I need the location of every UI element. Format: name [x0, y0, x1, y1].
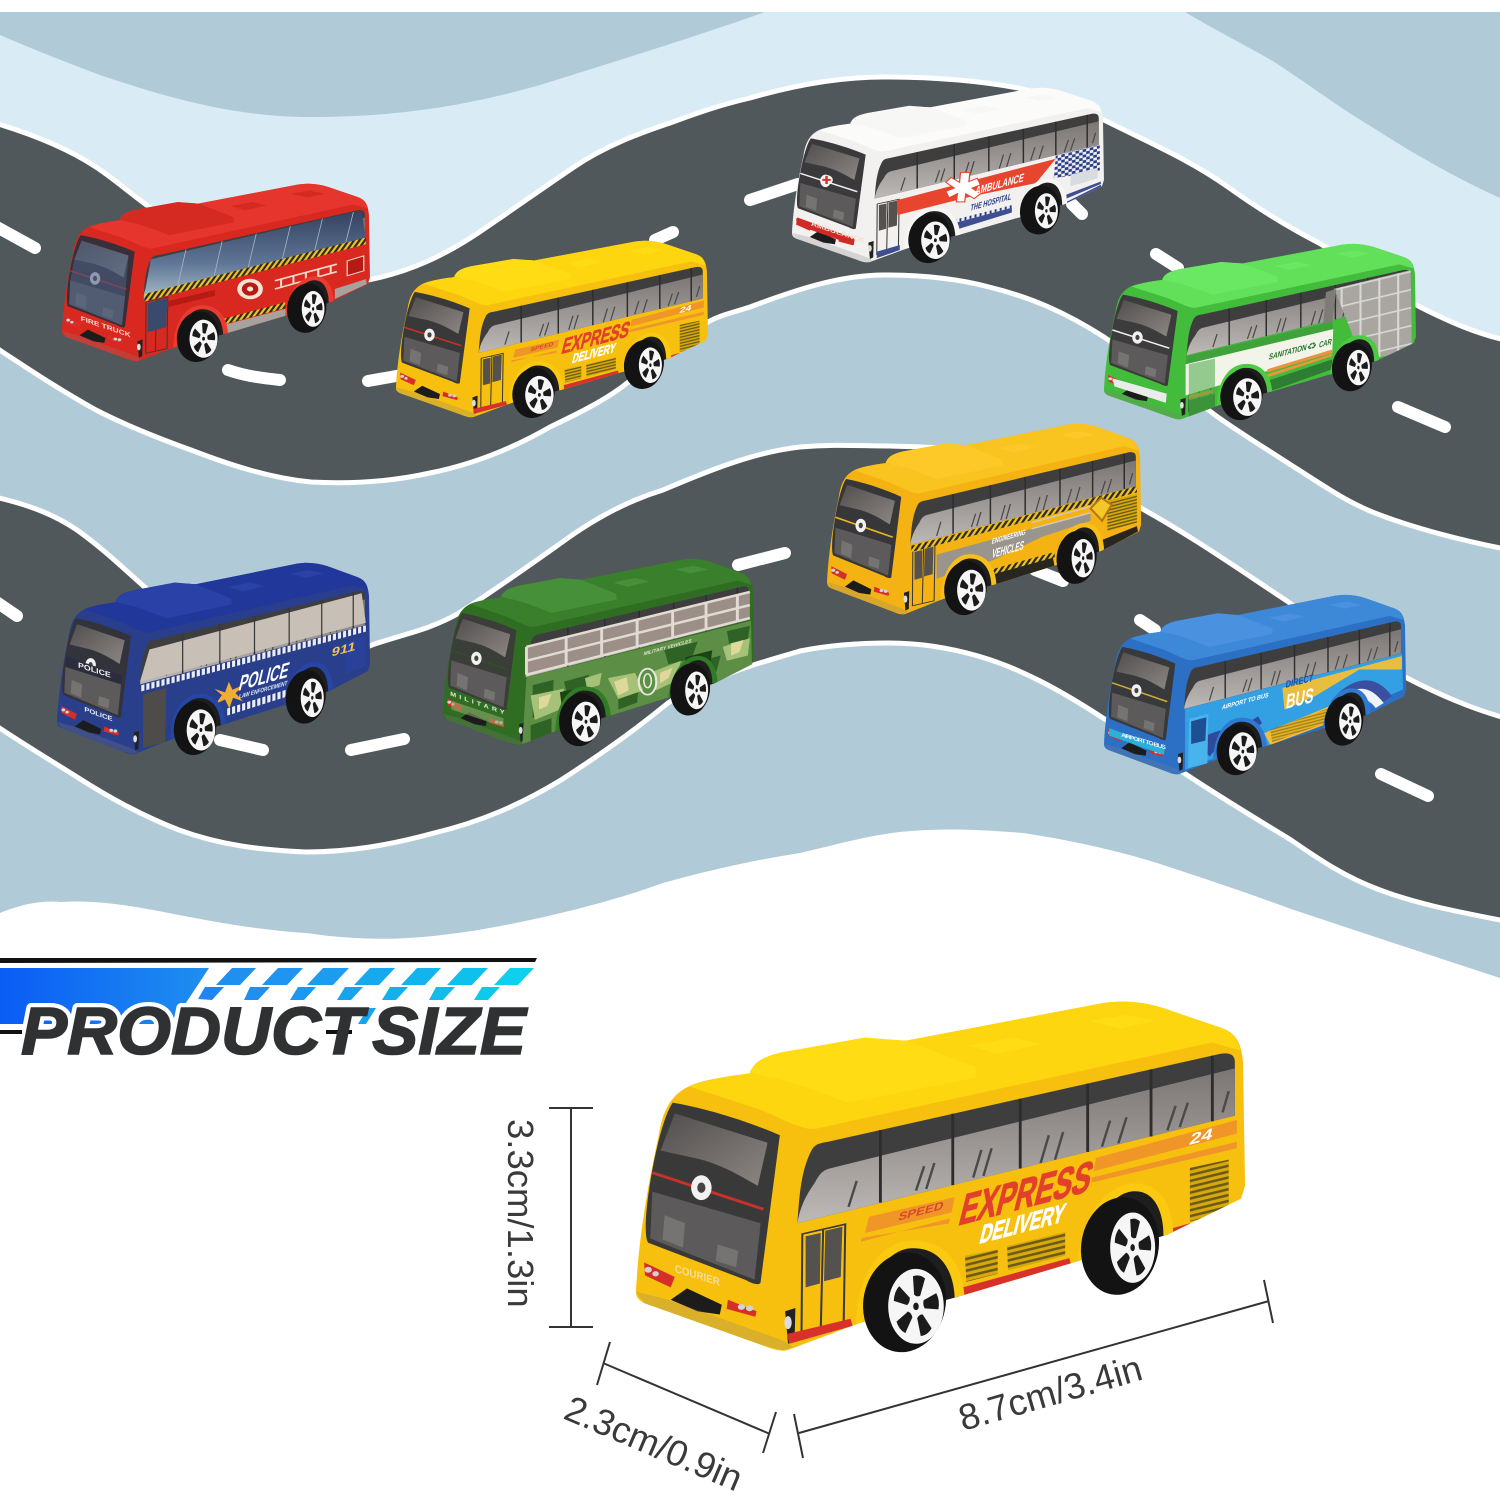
camouflage livery: MILITARY: [450, 691, 505, 717]
police livery: 911: [331, 638, 357, 659]
bus: green camouflage military: [443, 559, 754, 748]
express livery: 24: [678, 303, 693, 316]
express livery: [675, 1120, 1237, 1344]
bus: green sanitation: [1104, 244, 1416, 422]
sanitation livery: [1112, 270, 1412, 418]
sanitation text: SANITATION: [1268, 343, 1307, 362]
police livery: POLICE: [78, 660, 111, 680]
police star: [215, 682, 243, 708]
dimension: length: 8.7cm/3.4in: [954, 1347, 1147, 1439]
police text: POLICE: [236, 658, 292, 696]
sanitation livery: CAR: [1318, 337, 1333, 350]
road centre dashes: [0, 184, 1445, 796]
bus: white ambulance: [792, 88, 1104, 265]
military text: MILITARY VEHICLES: [643, 639, 692, 657]
express livery: DELIVERY: [571, 341, 617, 367]
express livery: DELIVERY: [977, 1198, 1068, 1250]
airport text: AIRPORT TO BUS: [1221, 691, 1269, 711]
dimension: length: [794, 1280, 1273, 1458]
express livery: [473, 301, 704, 414]
road map backdrop: [0, 12, 1500, 978]
ambulance livery: AMBULANCE: [811, 220, 865, 245]
lower road: [0, 445, 1500, 921]
fire livery: [69, 210, 367, 334]
heading: product size banner: [0, 958, 537, 1069]
ambulance livery: THE HOSPITAL: [969, 192, 1012, 213]
police livery: POLICE: [84, 705, 113, 723]
engineering livery: VEHICLES: [991, 539, 1025, 562]
airport livery: [1109, 654, 1403, 770]
engineering livery: [911, 486, 1138, 586]
express livery: COURIER: [675, 1262, 720, 1288]
police livery: LAW ENFORCEMENT: [238, 679, 289, 700]
dimension: width: 2.3cm/0.9in: [559, 1388, 749, 1499]
express text: EXPRESS: [955, 1152, 1098, 1236]
large yellow bus: [636, 1002, 1245, 1355]
express livery: 24: [1188, 1125, 1215, 1149]
dimension: height: 3.3cm/1.3in: [500, 1119, 541, 1308]
heading outline text: PRODUCT SIZE: [21, 994, 528, 1069]
bus: red fire engine: [62, 184, 370, 363]
police livery: [65, 593, 366, 753]
bus: yellow engineering vehicle: [827, 424, 1141, 617]
express livery: SPEED: [530, 341, 554, 353]
fire bus front text: FIRE TRUCK: [81, 315, 131, 339]
dimension: height: [500, 1108, 593, 1327]
upper road: [0, 77, 1500, 549]
express text: EXPRESS: [559, 316, 633, 359]
star of life: [946, 173, 980, 202]
express livery: SPEED: [897, 1199, 945, 1223]
dimension: width: [559, 1342, 776, 1499]
ambulance livery: [796, 145, 1102, 258]
engineering text: ENGINEERING: [991, 527, 1027, 546]
sanitation livery: ♻: [1306, 341, 1318, 353]
airport livery: AIRPORT TO BUS: [1121, 732, 1167, 751]
airport livery: BUS: [1285, 684, 1315, 714]
bus: blue airport direct bus: [1104, 595, 1406, 777]
camouflage livery: [450, 592, 752, 744]
ambulance text: AMBULANCE: [974, 170, 1025, 197]
heading text: PRODUCT SIZE: [21, 994, 528, 1069]
bus: yellow express delivery: [396, 241, 708, 419]
airport livery: DIRECT: [1285, 673, 1314, 691]
bus: navy police: [57, 563, 370, 757]
